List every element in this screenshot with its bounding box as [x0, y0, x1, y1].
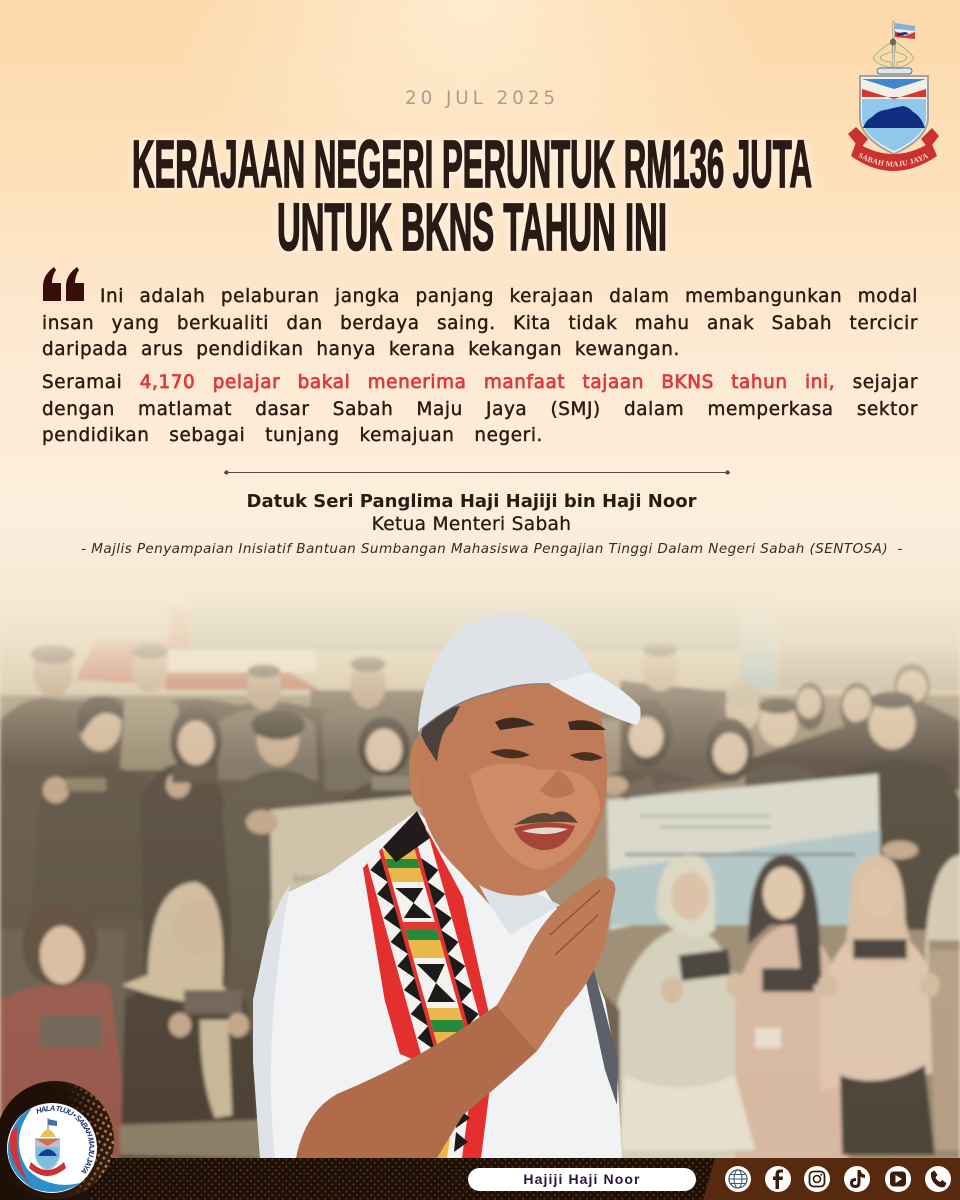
front row right	[618, 925, 745, 1160]
hand	[497, 877, 615, 1051]
vest edge	[578, 945, 618, 1105]
front row left	[0, 930, 125, 1160]
left board	[270, 795, 420, 925]
badge: Hala Tuju Sabah Maju Jaya: HALA TUJU • SABAH MAJU JAYA	[36, 1106, 94, 1174]
icon: instagram	[804, 1166, 830, 1192]
eyes and brows	[490, 718, 606, 798]
hair	[421, 706, 460, 762]
face	[420, 680, 607, 896]
scarf below arm	[457, 1087, 490, 1158]
speaker name: Datuk Seri Panglima Haji Hajiji bin Haji Noor	[247, 491, 696, 512]
ribbon	[848, 127, 939, 171]
right board	[607, 774, 880, 930]
shirt	[253, 811, 622, 1158]
icon: phone	[925, 1166, 951, 1192]
shield chief	[862, 79, 926, 89]
cap	[418, 614, 640, 732]
handle pill	[468, 1168, 696, 1191]
title	[128, 127, 815, 260]
speaker role: Ketua Menteri Sabah	[372, 514, 571, 535]
shield field	[862, 99, 926, 151]
quote text	[42, 286, 918, 446]
arm	[296, 1005, 537, 1158]
event line: - Majlis Penyampaian Inisiatif Bantuan Sumbangan Mahasiswa Pengajian Tinggi Dalam Negeri Sabah (SENTOSA) -	[81, 541, 903, 557]
moustache	[514, 811, 578, 825]
scarf	[363, 811, 490, 1158]
quote text: daripada arus pendidikan hanya kerana kekangan kewangan.	[42, 339, 680, 360]
decorative quote mark icon	[43, 267, 84, 301]
wreath	[877, 68, 912, 74]
zigzag triangles	[367, 858, 435, 1050]
photo: crowd of students: BANTUAN	[293, 874, 341, 885]
icon: facebook	[765, 1166, 791, 1192]
ribbon: SABAH MAJU JAYA	[858, 153, 928, 167]
hourglass	[395, 888, 432, 918]
divider rule	[224, 470, 730, 475]
quote text: Ini adalah pelaburan jangka panjang kerajaan dalam membangunkan modal	[100, 286, 918, 307]
ear	[409, 737, 431, 807]
photo fade overlay	[0, 560, 960, 1160]
photo: crowd of students	[0, 606, 960, 1158]
date: 20 JUL 2025	[405, 88, 559, 109]
right back row	[620, 680, 740, 800]
footer right panel	[703, 1158, 960, 1200]
background: soft top glow	[0, 0, 960, 560]
mini crest	[29, 1118, 66, 1176]
flagpole	[893, 21, 895, 67]
mid-left hands	[43, 777, 69, 803]
crest arms	[873, 41, 914, 68]
logo: Sabah coat of arms	[848, 20, 939, 171]
right middle row	[624, 699, 672, 767]
icon: youtube	[885, 1166, 911, 1192]
footer bar	[0, 1158, 960, 1200]
social icons	[725, 1166, 951, 1192]
quote text: insan yang berkualiti dan berdaya saing. Kita tidak mahu anak Sabah tercicir	[42, 313, 918, 334]
icon: globe	[725, 1166, 751, 1192]
mountain	[863, 106, 925, 128]
handle pill: Hajiji Haji Noor	[523, 1171, 641, 1187]
mouth	[514, 822, 575, 850]
quote text: Seramai 4,170 pelajar bakal menerima manfaat tajaan BKNS tahun ini, sejajar	[42, 372, 918, 393]
shield	[859, 75, 929, 155]
quote text: pendidikan sebagai tunjang kemajuan negeri.	[42, 425, 543, 446]
quote text: dengan matlamat dasar Sabah Maju Jaya (SMJ) dalam memperkasa sektor	[42, 399, 918, 420]
badge: Hala Tuju Sabah Maju Jaya	[0, 1081, 114, 1199]
portrait: Datuk Seri Hajiji waving	[253, 614, 640, 1158]
middle row	[30, 765, 185, 920]
flag	[895, 23, 915, 39]
collar	[465, 860, 560, 935]
stripes	[383, 850, 424, 882]
back row	[0, 695, 420, 1160]
icon: tiktok	[844, 1166, 870, 1192]
neck	[423, 805, 545, 905]
stage	[0, 560, 960, 695]
badge swooshes	[8, 1108, 80, 1192]
